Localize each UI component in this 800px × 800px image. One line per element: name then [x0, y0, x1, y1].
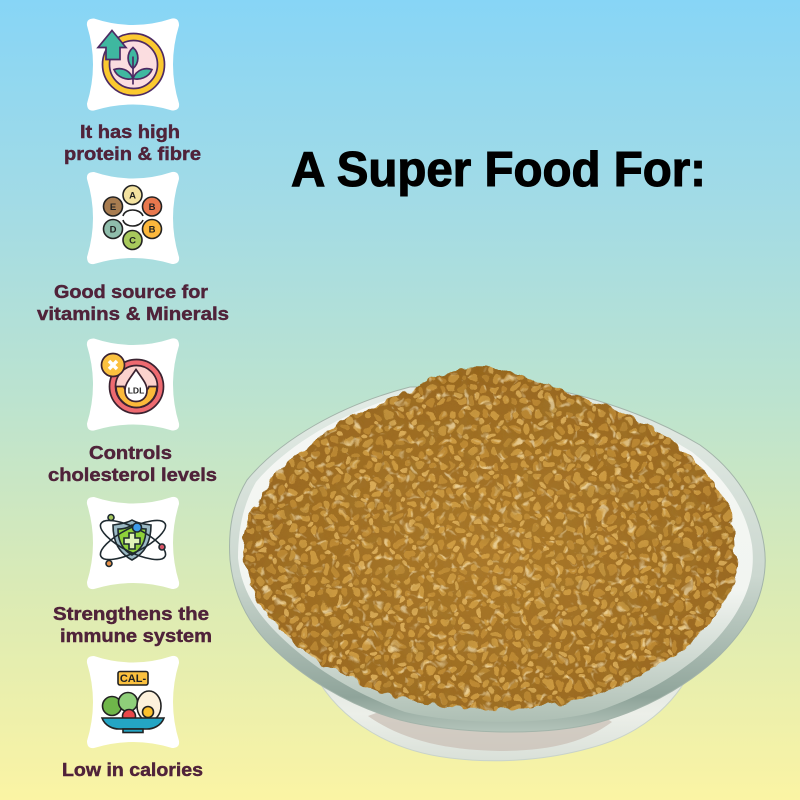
icon: LDL drop with cross: LDL — [128, 386, 144, 396]
label — [64, 121, 201, 164]
icon: vitamin circles: B — [149, 224, 156, 236]
panel: glass bowl with millet grains — [230, 360, 765, 761]
label: protein & fibre — [64, 143, 201, 164]
millet grain heap — [235, 360, 745, 715]
icon: vitamin circles: D — [110, 224, 117, 236]
icon: vitamin circles: E — [110, 202, 116, 213]
bowl rim — [230, 385, 765, 732]
label: Controls — [89, 442, 172, 463]
card — [87, 497, 179, 589]
icon: salad bowl with CAL sign: CAL- — [120, 673, 146, 685]
icon: vitamin circles: A — [129, 190, 136, 202]
panel: cholesterol — [48, 338, 217, 485]
label: Strengthens the — [53, 603, 209, 624]
label: It has high — [80, 121, 180, 142]
panel: low calories — [62, 656, 203, 780]
icon: vitamin circles: B — [149, 202, 156, 213]
panel: vitamins and minerals — [37, 172, 229, 324]
label: Good source for — [54, 281, 208, 302]
panel: high protein and fibre — [64, 18, 201, 164]
icon: vitamin circles — [104, 186, 162, 250]
label: cholesterol levels — [48, 464, 217, 485]
title: A Super Food For: — [291, 143, 706, 197]
label: Low in calories — [62, 759, 203, 780]
icon: vitamin circles: C — [129, 236, 136, 246]
icon: shield with atom orbits — [95, 513, 171, 567]
label — [48, 442, 217, 485]
card — [87, 338, 179, 431]
card — [87, 172, 179, 264]
bowl base — [312, 668, 692, 761]
card — [87, 18, 179, 111]
bowl inner white — [238, 392, 753, 722]
label: immune system — [60, 625, 212, 646]
card — [87, 656, 179, 748]
bowl base shadowed interior — [368, 708, 612, 751]
icon: LDL drop with cross — [102, 354, 164, 414]
label — [37, 281, 229, 324]
panel: immune system — [53, 497, 212, 646]
label — [53, 603, 212, 646]
icon: plant with up arrow — [98, 30, 164, 96]
label: vitamins & Minerals — [37, 303, 229, 324]
icon: salad bowl with CAL sign — [102, 672, 164, 732]
